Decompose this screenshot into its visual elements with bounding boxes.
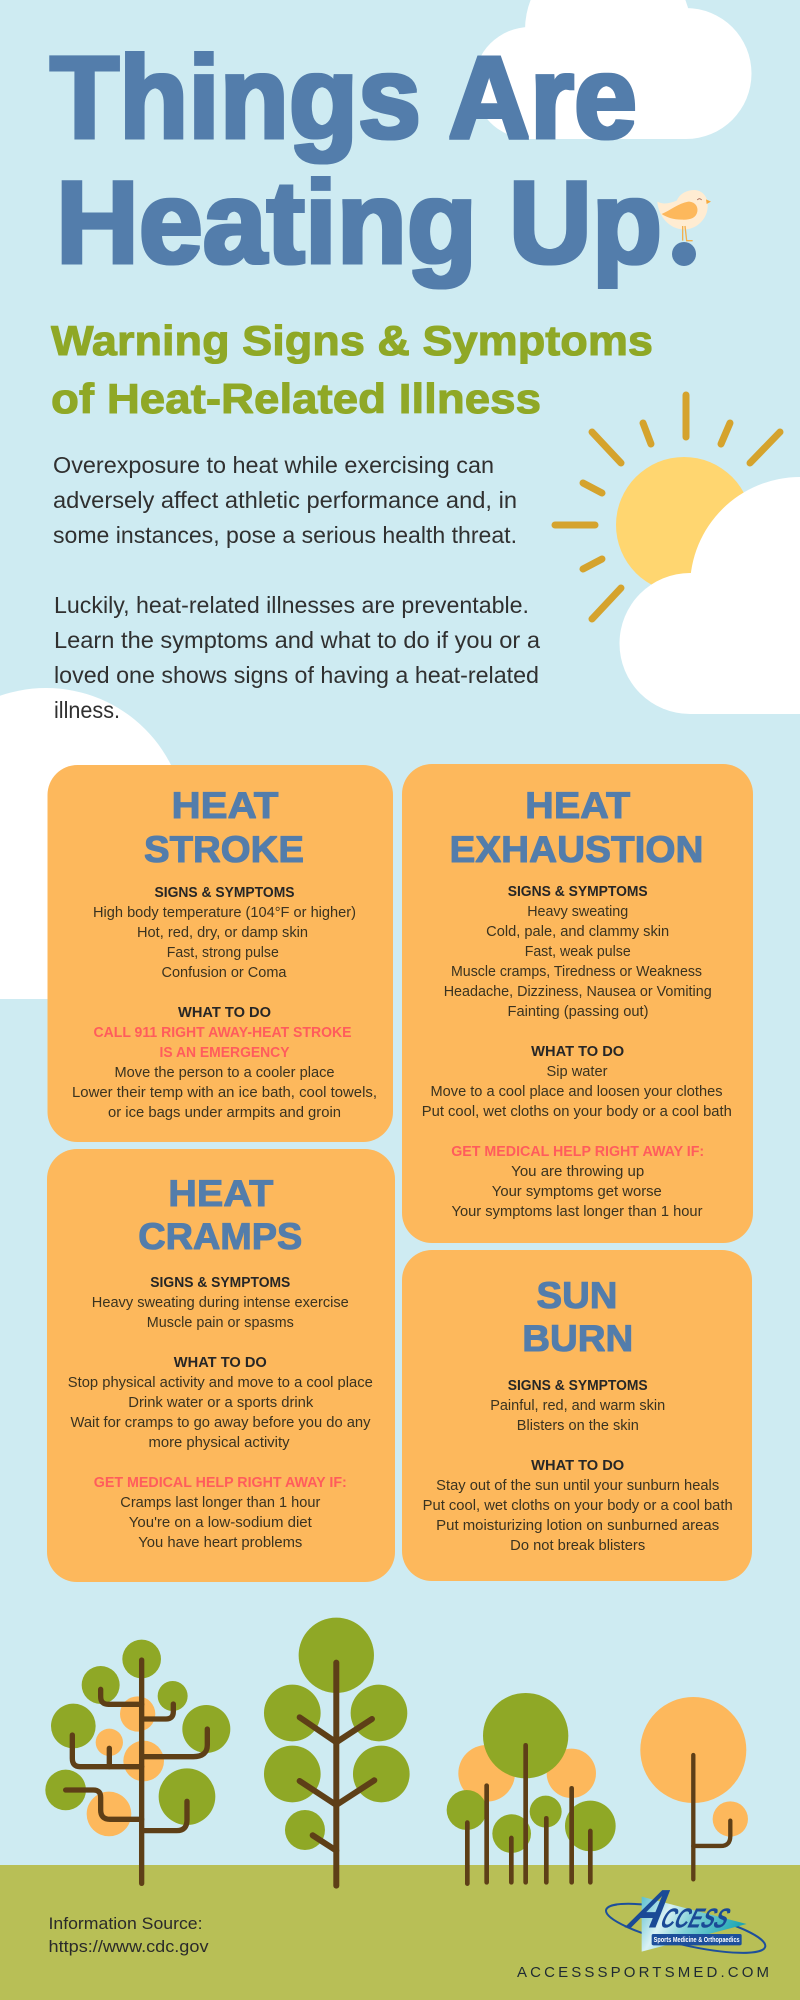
cloud: top right	[474, 0, 752, 139]
icon: tree 2	[264, 1618, 410, 1886]
intro text: adversely affect athletic performance and, in	[53, 487, 517, 513]
text: heat exhaustion what to do: Move to a cool place and loosen your clothes	[430, 1084, 722, 1100]
heading: sun burn: SUN	[536, 1275, 618, 1316]
text: heat stroke what to do: IS AN EMERGENCY	[160, 1045, 290, 1061]
intro text: Overexposure to heat while exercising can	[53, 452, 494, 478]
heading: heat stroke: HEAT	[172, 785, 279, 826]
text: sun burn signs and symptoms: SIGNS & SYMPTOMS	[508, 1378, 648, 1394]
text: heat exhaustion get medical help: GET MEDICAL HELP RIGHT AWAY IF:	[451, 1144, 704, 1160]
heading: sun burn: BURN	[522, 1318, 633, 1359]
text: heat stroke signs and symptoms: SIGNS & SYMPTOMS	[154, 885, 295, 901]
text: heat exhaustion what to do: Sip water	[546, 1064, 608, 1080]
text: heat exhaustion what to do	[422, 1044, 732, 1120]
icon: tree 1	[45, 1640, 230, 1883]
text: heat cramps what to do: Stop physical activity and move to a cool place	[68, 1375, 373, 1391]
heading: heat stroke	[144, 785, 304, 870]
text: website: ACCESSSPORTSMED.COM	[517, 1964, 769, 1981]
sun and right cloud	[555, 395, 800, 714]
logo: access sports medicine and orthopaedics: A	[615, 1878, 691, 1939]
text: heat cramps what to do: Wait for cramps to go away before you do any	[70, 1415, 371, 1431]
text: heat cramps what to do	[68, 1355, 373, 1451]
text: heat exhaustion signs and symptoms: SIGNS & SYMPTOMS	[508, 884, 648, 900]
text: heat cramps signs and symptoms	[92, 1275, 349, 1331]
text: sun burn signs and symptoms: Blisters on the skin	[517, 1418, 639, 1434]
text: sun burn what to do: Put cool, wet cloths on your body or a cool bath	[423, 1498, 733, 1514]
text: heat exhaustion signs and symptoms: Headache, Dizziness, Nausea or Vomiting	[444, 984, 712, 1000]
intro text: illness.	[54, 697, 120, 723]
text: information source: Information Source:	[48, 1915, 202, 1933]
text: heat cramps signs and symptoms: Heavy sweating during intense exercise	[92, 1295, 349, 1311]
text: heat stroke signs and symptoms: High body temperature (104°F or higher)	[93, 905, 356, 921]
text: heat exhaustion get medical help: Your symptoms last longer than 1 hour	[452, 1204, 703, 1220]
text: sun burn what to do	[423, 1458, 733, 1554]
text: heat stroke signs and symptoms: Confusion or Coma	[162, 965, 287, 981]
text: heat stroke what to do	[72, 1005, 377, 1121]
text: heat exhaustion what to do: Put cool, wet cloths on your body or a cool bath	[422, 1104, 732, 1120]
intro text: some instances, pose a serious health threat.	[53, 522, 517, 548]
heading: heat cramps	[138, 1173, 302, 1257]
logo: access sports medicine and orthopaedics	[602, 1878, 769, 1963]
text: heat stroke signs and symptoms: Fast, strong pulse	[167, 945, 279, 961]
heading: sun burn	[522, 1275, 633, 1359]
text: heat cramps what to do: Drink water or a sports drink	[128, 1395, 314, 1411]
text: heat cramps get medical help: You're on a low-sodium diet	[129, 1515, 312, 1531]
text: heat exhaustion signs and symptoms: Fast, weak pulse	[525, 944, 631, 960]
text: heat cramps signs and symptoms: Muscle pain or spasms	[147, 1315, 294, 1331]
title: Heating Up	[56, 157, 662, 289]
text: heat exhaustion what to do: WHAT TO DO	[531, 1044, 624, 1060]
cloud: lower left	[0, 688, 186, 999]
heading: heat cramps: CRAMPS	[138, 1216, 302, 1257]
panel: heat cramps	[47, 1149, 395, 1582]
text: heat stroke signs and symptoms	[93, 885, 356, 981]
subtitle	[51, 317, 653, 422]
text: information source	[48, 1915, 209, 1956]
intro text: loved one shows signs of having a heat-related	[54, 662, 539, 688]
text: heat exhaustion get medical help: You are throwing up	[511, 1164, 644, 1180]
ground	[0, 1865, 800, 2000]
cloud: right	[620, 477, 800, 714]
text: heat stroke what to do: or ice bags under armpits and groin	[108, 1105, 341, 1121]
text: heat cramps signs and symptoms: SIGNS & SYMPTOMS	[150, 1275, 291, 1291]
subtitle: of Heat-Related Illness	[51, 375, 541, 422]
title	[50, 32, 696, 289]
logo: access sports medicine and orthopaedics: Sports Medicine & Orthopaedics	[654, 1937, 740, 1944]
text: heat stroke what to do: Lower their temp with an ice bath, cool towels,	[72, 1085, 377, 1101]
icon: tree 4	[640, 1697, 748, 1879]
logo: access sports medicine and orthopaedics: CCESS	[655, 1904, 735, 1934]
heading: heat exhaustion: HEAT	[525, 785, 631, 826]
panel: heat stroke	[48, 765, 393, 1142]
text: information source: https://www.cdc.gov	[48, 1938, 209, 1956]
text: heat exhaustion signs and symptoms: Cold, pale, and clammy skin	[486, 924, 669, 940]
text: sun burn what to do: WHAT TO DO	[531, 1458, 624, 1474]
intro text: Luckily, heat-related illnesses are preventable.	[54, 592, 529, 618]
subtitle: Warning Signs & Symptoms	[51, 317, 653, 364]
heading: heat exhaustion: EXHAUSTION	[450, 829, 704, 870]
heading: heat stroke: STROKE	[144, 829, 304, 870]
text: heat stroke what to do: CALL 911 RIGHT AWAY-HEAT STROKE	[94, 1025, 352, 1041]
text: heat stroke what to do: Move the person to a cooler place	[114, 1065, 334, 1081]
intro text: Learn the symptoms and what to do if you or a	[54, 627, 540, 653]
text: heat cramps what to do: WHAT TO DO	[174, 1355, 267, 1371]
heading: heat cramps: HEAT	[168, 1173, 274, 1214]
text: heat cramps what to do: more physical activity	[148, 1435, 290, 1451]
text: heat cramps get medical help	[94, 1475, 347, 1551]
text: heat exhaustion get medical help: Your symptoms get worse	[492, 1184, 662, 1200]
sun	[555, 395, 780, 619]
title: Things Are	[50, 32, 637, 164]
icon: bird on the title's full stop	[657, 190, 711, 241]
panel: heat exhaustion	[402, 764, 753, 1243]
text: sun burn signs and symptoms: Painful, red, and warm skin	[490, 1398, 665, 1414]
text: heat cramps get medical help: You have heart problems	[138, 1535, 302, 1551]
panel: sun burn	[402, 1250, 752, 1581]
text: heat stroke signs and symptoms: Hot, red, dry, or damp skin	[137, 925, 308, 941]
text: heat exhaustion get medical help	[451, 1144, 704, 1220]
text: heat exhaustion signs and symptoms: Fainting (passing out)	[508, 1004, 648, 1020]
icon: tree cluster 3	[447, 1693, 616, 1884]
text: sun burn what to do: Put moisturizing lotion on sunburned areas	[436, 1518, 719, 1534]
text: heat exhaustion signs and symptoms: Heavy sweating	[527, 904, 628, 920]
text: sun burn signs and symptoms	[490, 1378, 665, 1434]
text: heat cramps get medical help: GET MEDICAL HELP RIGHT AWAY IF:	[94, 1475, 347, 1491]
text: heat exhaustion signs and symptoms	[444, 884, 712, 1020]
text: heat stroke what to do: WHAT TO DO	[178, 1005, 271, 1021]
text: heat cramps get medical help: Cramps last longer than 1 hour	[120, 1495, 320, 1511]
intro text	[53, 452, 540, 723]
heading: heat exhaustion	[450, 785, 704, 870]
text: heat exhaustion signs and symptoms: Muscle cramps, Tiredness or Weakness	[451, 964, 702, 980]
text: sun burn what to do: Stay out of the sun until your sunburn heals	[436, 1478, 719, 1494]
text: sun burn what to do: Do not break blisters	[510, 1538, 645, 1554]
